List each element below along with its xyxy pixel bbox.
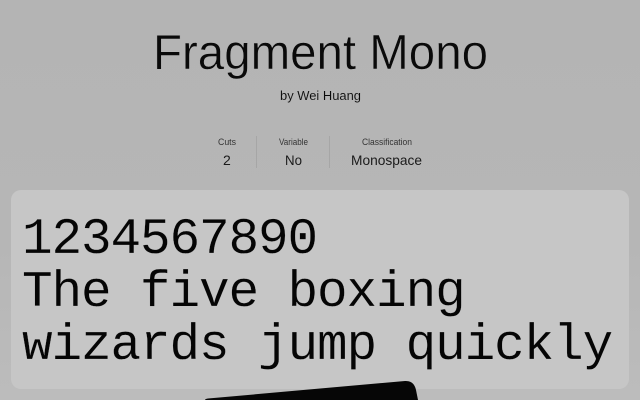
metadata: variable: Variable	[279, 137, 308, 147]
title: Fragment Mono	[153, 26, 488, 80]
metadata: variable	[279, 137, 308, 168]
metadata: cuts: Cuts	[218, 137, 236, 147]
metadata: variable: No	[285, 152, 302, 168]
metadata: classification: Classification	[362, 137, 412, 147]
specimen panel	[11, 190, 629, 389]
byline: by Wei Huang	[280, 88, 361, 103]
metadata: cuts	[218, 137, 236, 168]
specimen: digits: 1234567890	[22, 212, 317, 269]
black tilted card at bottom	[205, 381, 418, 400]
metadata row	[218, 136, 422, 168]
metadata: classification: Monospace	[351, 152, 422, 168]
specimen: line three: wizards jump quickly	[22, 318, 612, 375]
metadata: cuts: 2	[223, 152, 231, 168]
specimen: line two: The five boxing	[22, 265, 465, 322]
metadata: classification	[351, 137, 422, 168]
